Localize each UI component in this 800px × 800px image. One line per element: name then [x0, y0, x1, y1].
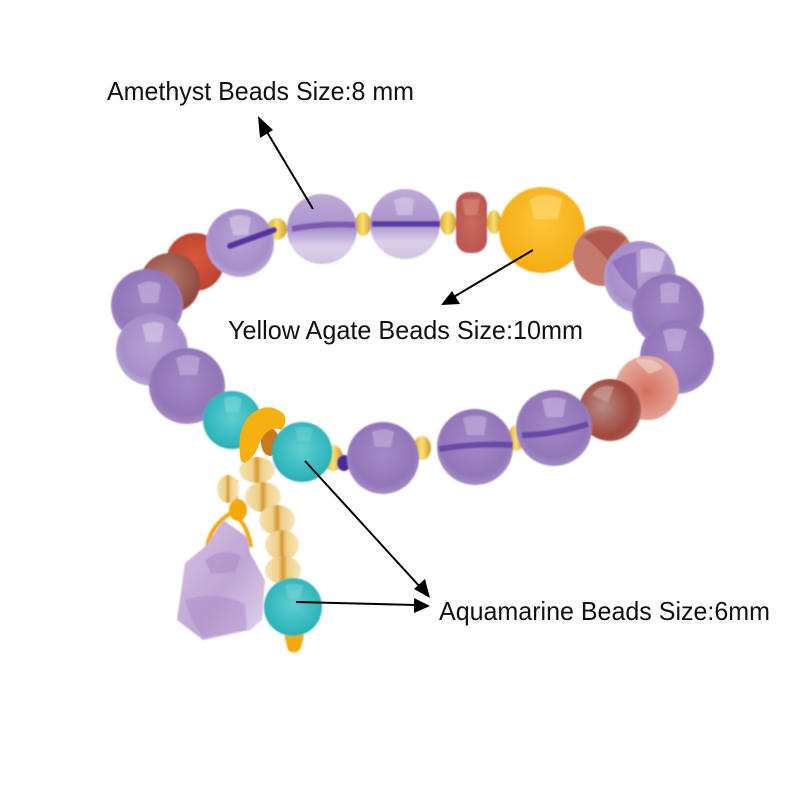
bead: amethyst bottom 1: [516, 390, 592, 466]
bead: dark red: [579, 379, 641, 441]
label: yellow agate size: Yellow Agate Beads Size:10mm: [228, 317, 583, 345]
bead: rust: [166, 233, 224, 291]
citrine beads: [217, 457, 301, 584]
bead: red veined: [573, 226, 633, 286]
bead: amethyst right 2: [632, 274, 704, 346]
spacer beads: gold: [119, 210, 637, 471]
bead: amethyst top left: [206, 209, 274, 277]
bead: amethyst right 1: [604, 241, 676, 313]
bead: amethyst top light: [287, 194, 357, 264]
bead: aquamarine drop: [264, 578, 322, 636]
bead: amethyst left 3: [149, 348, 225, 424]
arrow: yellow agate callout: [441, 250, 533, 305]
orange hole behind ring: [261, 428, 279, 456]
bead: red rondelle: [456, 192, 487, 253]
bead: aquamarine 1: [203, 391, 261, 449]
yellow thread ring: [239, 407, 285, 463]
arrow: amethyst callout: [258, 116, 313, 209]
bead: amethyst left 1: [111, 269, 183, 341]
cord: lower knot: [284, 634, 304, 653]
bead: aquamarine 2: [272, 422, 332, 482]
label: aquamarine size: Aquamarine Beads Size:6mm: [439, 598, 770, 626]
cord: yellow: [207, 480, 251, 547]
bracelet: [111, 187, 714, 494]
arrow: aquamarine bead callout: [305, 461, 430, 598]
charm: amethyst crystal and citrine strand: [177, 457, 322, 653]
bead: pink veined: [615, 356, 679, 420]
thread knot: [337, 455, 351, 471]
bead: amethyst bottom 2: [437, 409, 513, 485]
bead: amethyst right 3: [640, 320, 714, 394]
crystal: rough amethyst: [177, 520, 265, 640]
bead: amethyst top middle: [370, 189, 440, 259]
bead: amethyst bottom 3: [347, 422, 419, 494]
label: amethyst size: Amethyst Beads Size:8 mm: [107, 78, 414, 106]
bead: brown agate: [140, 253, 200, 313]
bead: yellow agate: [499, 187, 585, 273]
bead: amethyst left 2: [116, 314, 188, 386]
arrow: aquamarine drop callout: [296, 598, 430, 613]
